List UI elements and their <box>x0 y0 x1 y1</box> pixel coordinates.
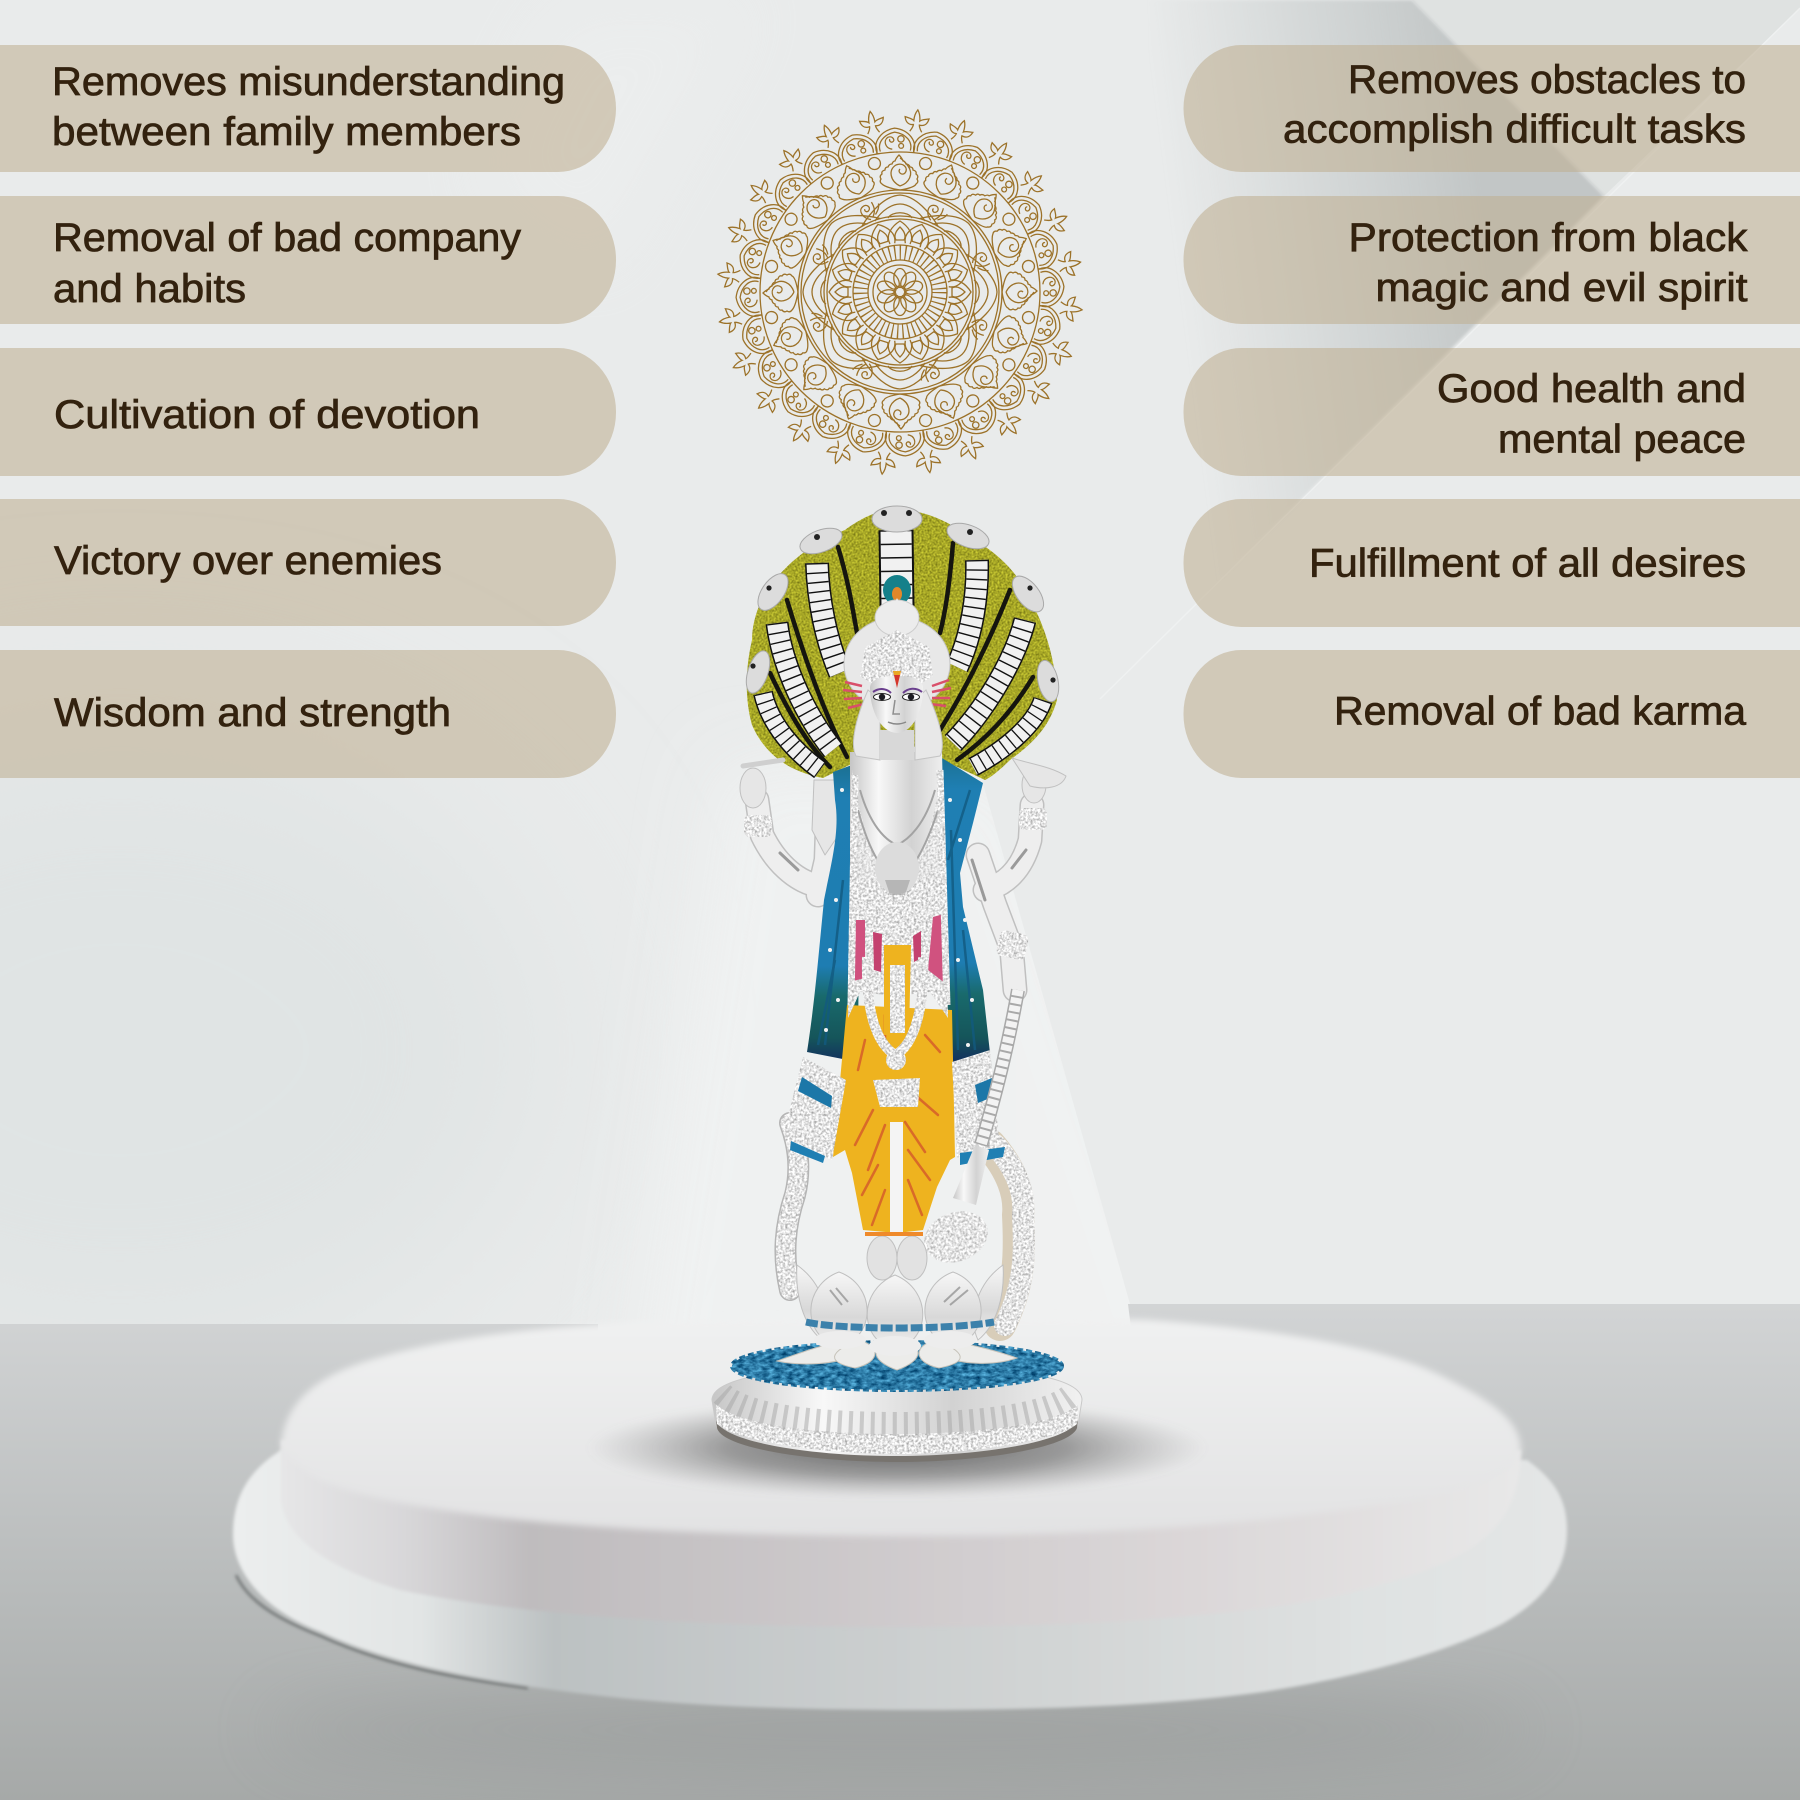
yellow dhoti <box>833 1005 955 1234</box>
silver torso and jewellery <box>848 752 950 1107</box>
dhoti fold lines <box>855 1015 940 1225</box>
peacock feather <box>883 575 911 605</box>
pill: devotion: Cultivation of devotion <box>54 393 480 437</box>
lotus cup petals <box>797 1265 1003 1350</box>
pill: desires: Fulfillment of all desires <box>1309 542 1746 586</box>
pink sash panels <box>849 913 950 987</box>
central yellow sash <box>884 945 911 1035</box>
hood black stripes <box>770 543 1033 767</box>
floor <box>0 1304 1800 1800</box>
pill: obstacles <box>1184 45 1800 172</box>
pill: victory: Victory over enemies <box>54 539 442 583</box>
pill: karma: Removal of bad karma <box>1334 690 1747 734</box>
garland <box>867 957 923 1055</box>
pill: bad company: Removal of bad company <box>53 216 521 260</box>
pill: health <box>1184 348 1800 476</box>
pill: bad company: and habits <box>53 267 246 311</box>
lotus blue stripe <box>806 1322 994 1328</box>
pill: misunderstanding: Removes misunderstanding <box>52 60 565 104</box>
hair locks <box>853 690 942 760</box>
pill: health: Good health and <box>1437 367 1746 411</box>
lotus and pedestal <box>712 1265 1082 1462</box>
snake tail coils <box>785 1123 1024 1325</box>
mace <box>918 990 1018 1270</box>
robe pleats <box>818 790 975 1050</box>
robe inner trim <box>851 770 947 1005</box>
necklaces <box>858 790 938 880</box>
pill: health: mental peace <box>1498 418 1746 462</box>
crown <box>860 630 933 684</box>
podium <box>233 1317 1567 1710</box>
pill: obstacles: accomplish difficult tasks <box>1283 108 1746 152</box>
lotus lower leaves <box>777 1338 1017 1370</box>
pedestal silver body <box>712 1366 1082 1460</box>
pill: wisdom: Wisdom and strength <box>54 691 451 735</box>
snake heads <box>742 506 1062 704</box>
raised hands and bracelets <box>740 758 1066 855</box>
statue <box>712 506 1082 1462</box>
pill: black magic: Protection from black <box>1348 216 1749 260</box>
statue contact shadow <box>587 1398 1207 1498</box>
pedestal beaded ring <box>716 1404 1078 1454</box>
podium upper disc side <box>281 1440 1521 1627</box>
snake necks <box>763 530 1043 770</box>
left benefit pills <box>0 45 616 778</box>
eyes and brows <box>873 689 922 693</box>
arm silver fill <box>757 800 1032 990</box>
pedestal flute band <box>722 1394 1072 1424</box>
right benefit pills <box>1184 45 1800 778</box>
pill: misunderstanding: between family members <box>52 110 521 154</box>
pill: karma <box>1184 650 1800 778</box>
robe hem panels <box>787 1050 1005 1165</box>
feet <box>865 1232 927 1280</box>
background wall <box>0 0 1800 1258</box>
podium upper disc top <box>281 1317 1521 1536</box>
pill: misunderstanding <box>0 45 616 172</box>
pill: desires <box>1184 499 1800 627</box>
pill: black magic <box>1184 196 1800 324</box>
lotus petal streaks <box>830 1287 968 1305</box>
mandala ornament <box>617 11 1149 599</box>
arm outlines <box>757 800 1032 990</box>
blue robe panels <box>807 752 990 1062</box>
pink fans <box>843 680 951 708</box>
arm dark reflections <box>780 850 1026 900</box>
waist ornament <box>873 1078 920 1107</box>
podium lower disc <box>233 1450 1567 1710</box>
pill: devotion <box>0 348 616 476</box>
serpent hood <box>742 506 1062 780</box>
pill: obstacles: Removes obstacles to <box>1348 58 1746 102</box>
pill: wisdom <box>0 650 616 778</box>
face <box>870 676 923 733</box>
four arms <box>740 758 1066 990</box>
pill: bad company <box>0 196 616 324</box>
neck <box>880 730 914 760</box>
blue water <box>732 1342 1062 1390</box>
deity head and crown <box>843 575 951 760</box>
pill: victory <box>0 499 616 626</box>
halo <box>844 617 950 711</box>
hand-held chakra rod <box>743 760 783 766</box>
pill: black magic: magic and evil spirit <box>1376 266 1748 310</box>
